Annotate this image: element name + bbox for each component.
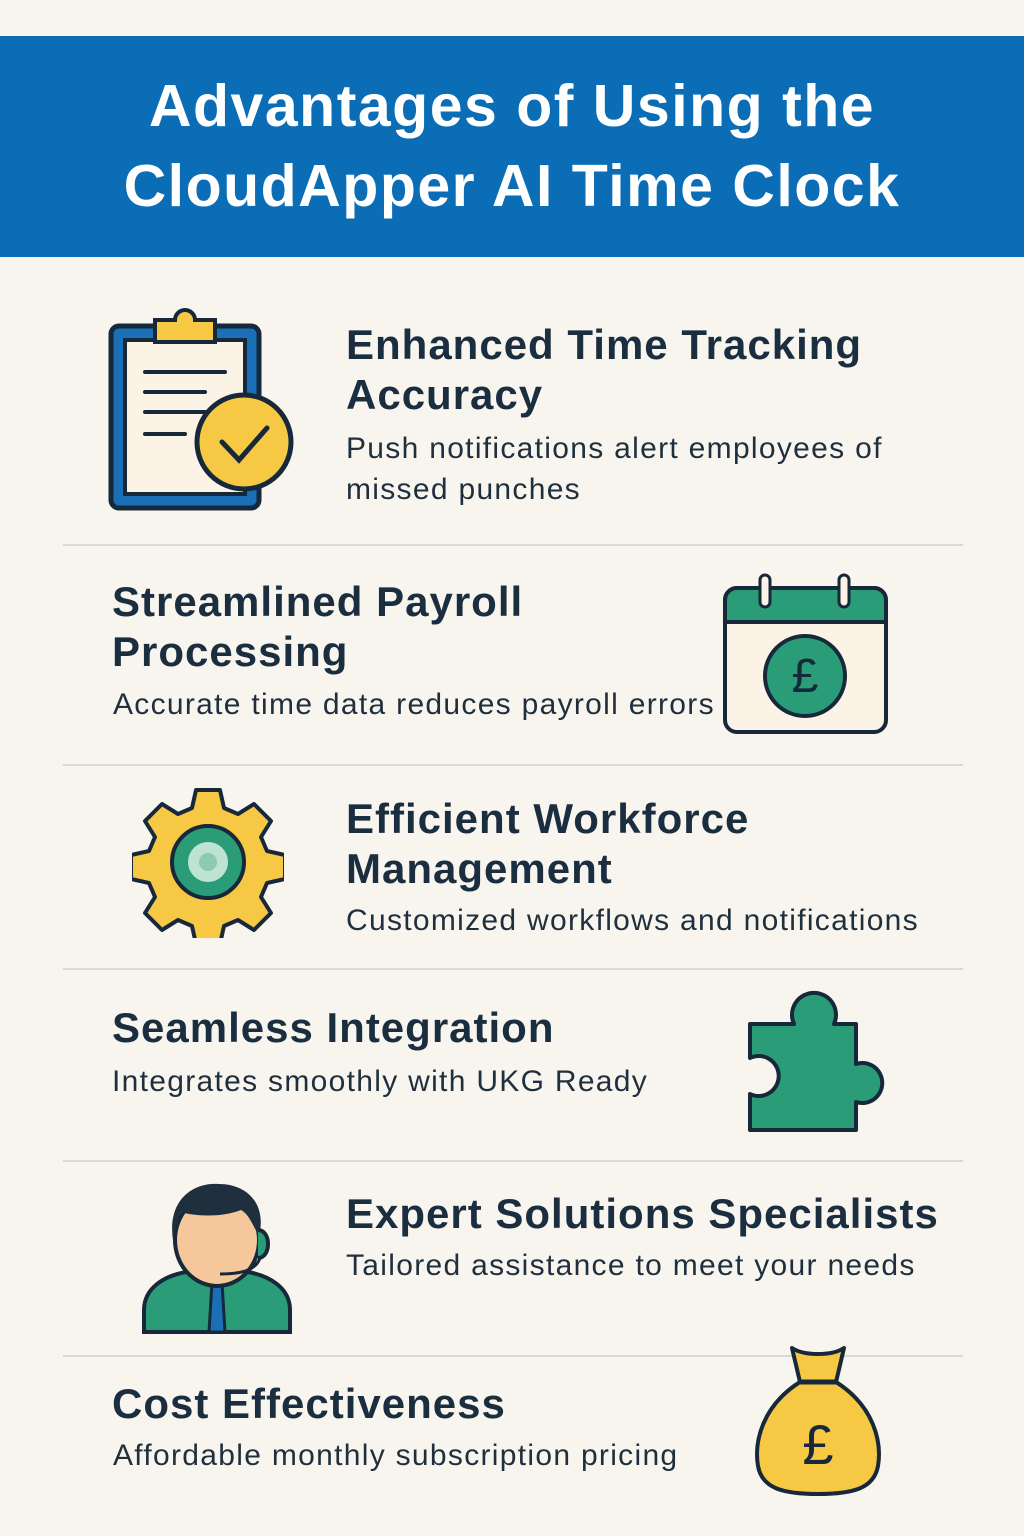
icon: gear [132, 788, 284, 938]
heading 6: Cost Effectiveness [112, 1380, 506, 1427]
body 1: missed punches [346, 473, 581, 506]
icon: puzzle [748, 990, 884, 1132]
body 6: Affordable monthly subscription pricing [113, 1439, 678, 1472]
heading 1: Accuracy [346, 371, 543, 418]
icon: calendar: £ [792, 650, 818, 703]
body 5: Tailored assistance to meet your needs [346, 1249, 916, 1282]
heading 3 [346, 795, 749, 892]
heading 3: Management [346, 845, 613, 892]
heading 5: Expert Solutions Specialists [346, 1190, 939, 1237]
icon: calendar [723, 574, 888, 734]
heading 1: Enhanced Time Tracking [346, 321, 862, 368]
icon: money bag [755, 1346, 881, 1496]
title [0, 36, 1024, 257]
heading 2: Processing [112, 628, 348, 675]
title: Advantages of Using the [149, 73, 875, 139]
body 1 [346, 432, 883, 506]
heading 2 [112, 578, 523, 675]
heading 3: Efficient Workforce [346, 795, 749, 842]
body 4: Integrates smoothly with UKG Ready [112, 1065, 648, 1098]
body 3: Customized workflows and notifications [346, 904, 919, 937]
icon: money bag: £ [802, 1413, 834, 1476]
icon: clipboard [108, 308, 294, 510]
icon: support person [142, 1184, 292, 1334]
heading 4: Seamless Integration [112, 1004, 554, 1051]
title: CloudApper AI Time Clock [124, 153, 900, 219]
body 2: Accurate time data reduces payroll errors [113, 688, 715, 721]
body 1: Push notifications alert employees of [346, 432, 883, 465]
heading 1 [346, 321, 862, 418]
heading 2: Streamlined Payroll [112, 578, 523, 625]
